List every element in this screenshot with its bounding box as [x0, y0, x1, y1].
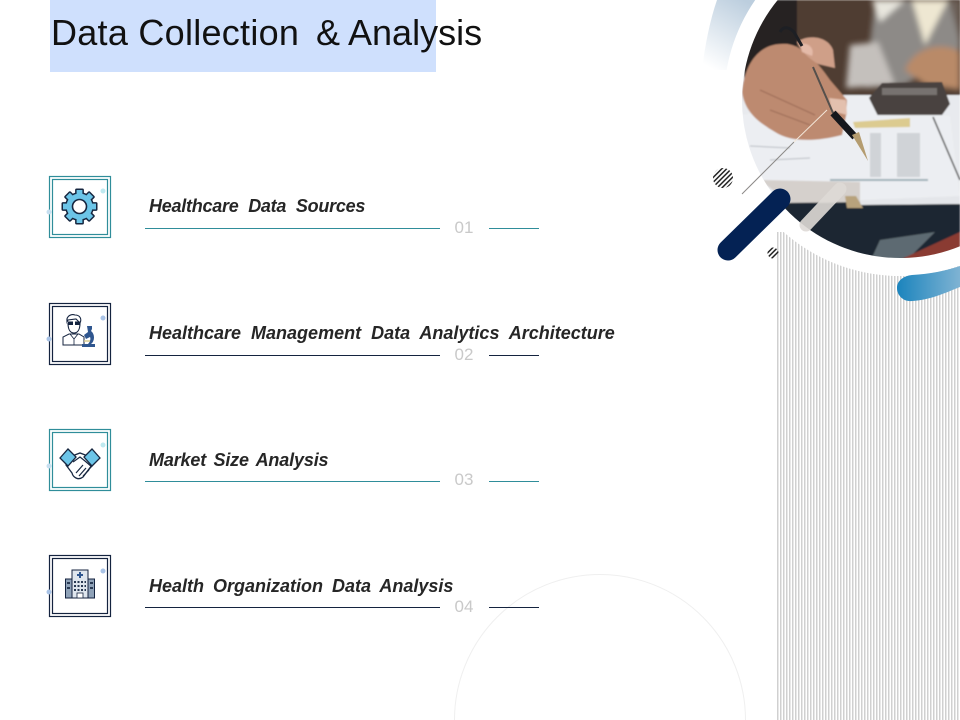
title: Data Collection: [51, 12, 299, 53]
divider line: [145, 355, 440, 356]
row 2: Healthcare Management Data Analytics Architecture: [46, 302, 615, 366]
label: Health Organization Data Analysis: [149, 576, 453, 596]
background decorative graphics: [454, 0, 960, 720]
number: 02: [455, 345, 473, 364]
icon: hospital: [46, 554, 112, 618]
number: 04: [455, 597, 473, 616]
translucent white pill: [806, 189, 840, 225]
thin diagonal line: [742, 142, 794, 194]
calculator: [869, 82, 950, 115]
navy rounded bar: [728, 199, 780, 250]
title: [51, 12, 482, 53]
divider line: [145, 607, 440, 608]
hatched circle small: [768, 248, 778, 258]
label: Healthcare Management Data Analytics Architecture: [149, 323, 615, 343]
title: & Analysis: [316, 12, 482, 53]
row 1: Healthcare Data Sources: [46, 176, 539, 238]
hatched circle large: [713, 168, 733, 188]
divider line: [145, 481, 440, 482]
blue rounded bar: [897, 266, 960, 301]
icon: scientist with microscope: [46, 302, 112, 366]
divider line right: [489, 228, 539, 229]
white ring: [724, 0, 960, 276]
label: Healthcare Data Sources: [149, 196, 365, 216]
divider line right: [489, 355, 539, 356]
divider line right: [489, 607, 539, 608]
label: Market Size Analysis: [149, 450, 328, 470]
paper: [868, 98, 878, 116]
number: 01: [455, 218, 473, 237]
number: 03: [455, 470, 473, 489]
icon: handshake: [46, 428, 112, 492]
row 3: Market Size Analysis: [46, 428, 539, 492]
divider line: [145, 228, 440, 229]
blurred suit background: [790, 0, 960, 95]
faint circle outline: [454, 575, 746, 720]
title band: [50, 0, 436, 72]
divider line right: [489, 481, 539, 482]
photo: hand with pen over documents: [740, 0, 960, 262]
binder dark band: [785, 201, 960, 256]
striped panel: [777, 232, 960, 720]
row 4: Health Organization Data Analysis: [46, 554, 539, 618]
pale arc: [702, 0, 762, 70]
pen: [780, 28, 802, 46]
hand: [742, 44, 847, 140]
icon: gear: [46, 176, 112, 238]
